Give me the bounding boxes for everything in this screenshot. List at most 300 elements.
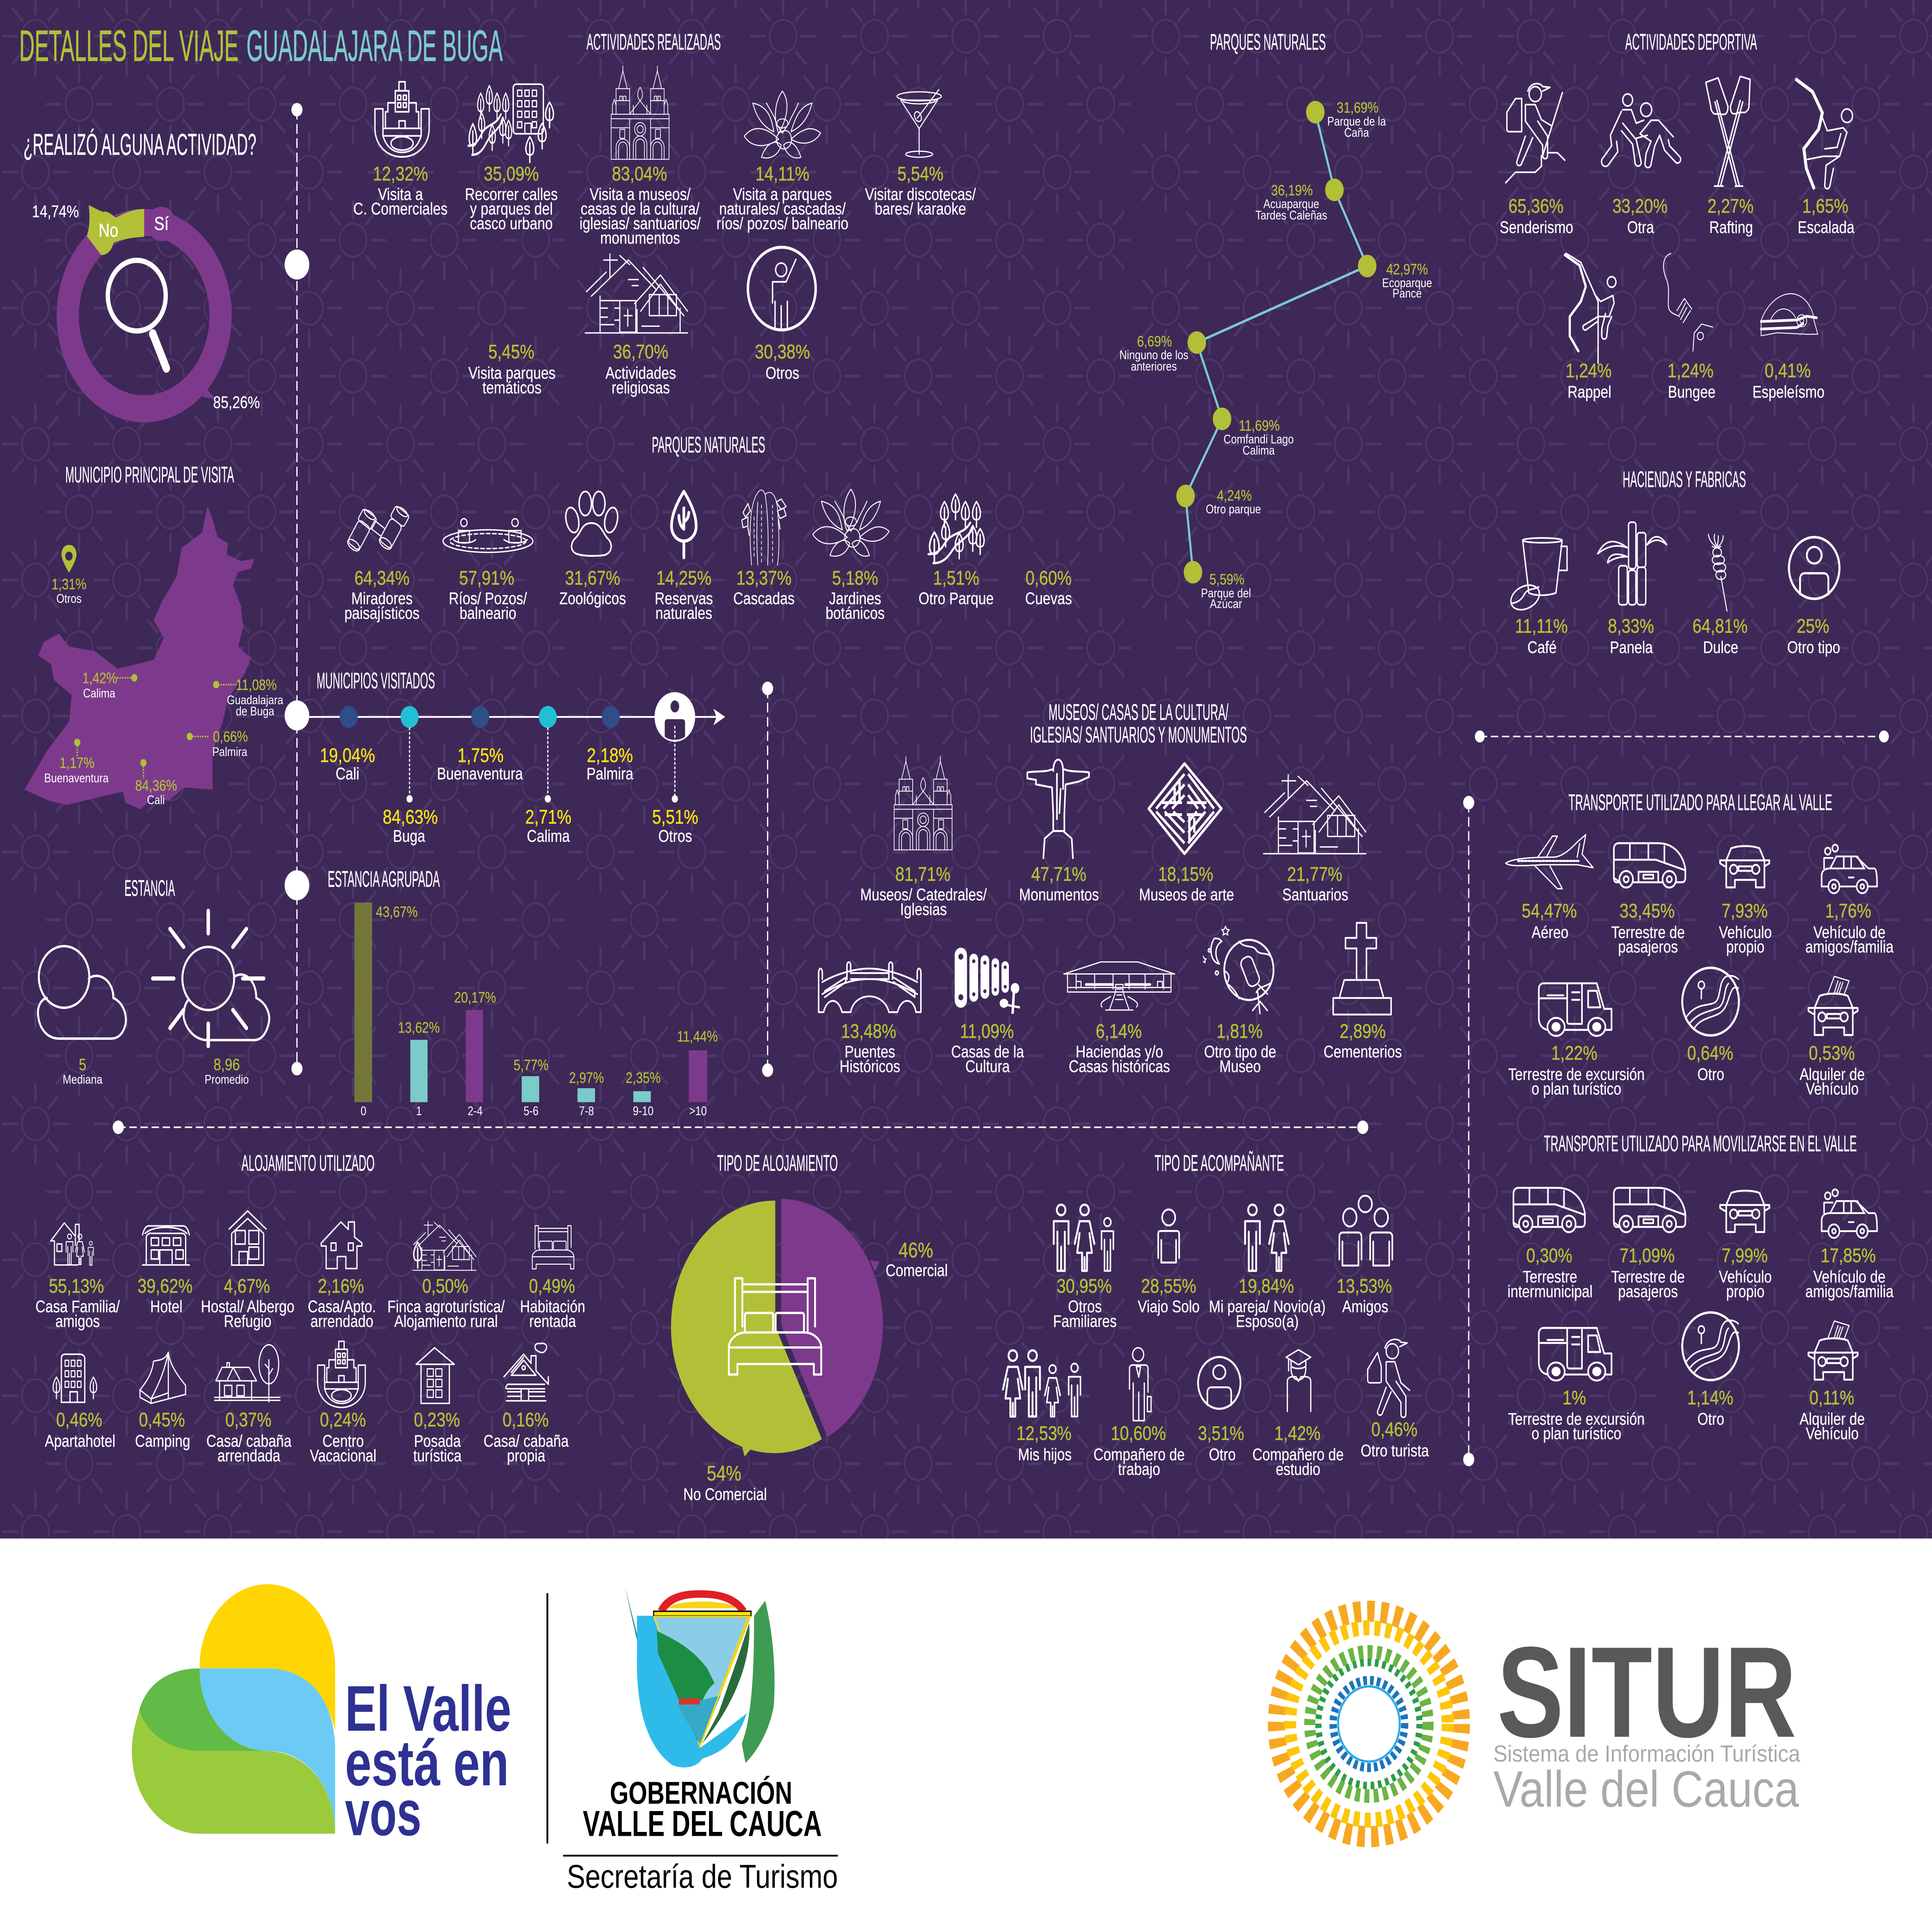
label: Calima (527, 827, 570, 845)
text: secretaría de turismo: Secretaría de Turismo (567, 1858, 838, 1895)
label: Santuarios (1282, 886, 1348, 904)
value: 2,27% (1708, 195, 1753, 217)
icon: plane (1506, 835, 1593, 889)
panel: parques naturales route (1119, 30, 1432, 611)
label: Mis hijos (1018, 1446, 1072, 1464)
icon: xylophone (955, 948, 1020, 1014)
value: 0,46% (1371, 1418, 1417, 1440)
value: 0,60% (1026, 567, 1071, 589)
value: 21,77% (1287, 863, 1342, 885)
value: 30,95% (1057, 1275, 1112, 1297)
value: Otros: 5,51% (652, 806, 698, 828)
icon: iglesia (894, 757, 952, 850)
icon: calles y parques (468, 84, 553, 162)
panel: transporte para llegar al valle (1506, 790, 1894, 1098)
icon: rental car (1808, 976, 1858, 1035)
label: pasajeros (1618, 1282, 1678, 1301)
bar chart: >10 (689, 1104, 707, 1118)
value: 7,99% (1722, 1245, 1768, 1267)
value: 13,48% (841, 1020, 896, 1042)
label: turística (413, 1447, 462, 1465)
value: 0,30% (1526, 1245, 1572, 1267)
label: Hostal/ Albergo (201, 1298, 294, 1316)
text: gobernación: VALLE DEL CAUCA (583, 1804, 822, 1844)
value: 1,81% (1216, 1020, 1263, 1042)
label: Actividades (605, 364, 676, 383)
icon: hacienda (1064, 962, 1175, 1010)
label: Otro Parque (918, 589, 994, 608)
timeline with nodes (297, 692, 725, 803)
panel: tipo de acompañante (1003, 1151, 1429, 1479)
icon: tent (140, 1352, 185, 1403)
route labels: Pance (1393, 287, 1422, 301)
icon: car with friends (1821, 1189, 1877, 1238)
value: comercial: 46% (899, 1238, 933, 1262)
icon: person (1198, 1357, 1240, 1409)
timeline connector lines (113, 103, 1889, 1466)
icon: hostal (229, 1211, 266, 1265)
value: 0,23% (414, 1409, 460, 1430)
label: Alojamiento rural (394, 1312, 498, 1331)
logo: El Valle está en vos: está en (345, 1728, 509, 1799)
label: estudio (1276, 1460, 1320, 1479)
label: y parques del (470, 200, 553, 218)
donut labels: Sí (154, 213, 169, 234)
value: 13,37% (736, 567, 791, 589)
value: 47,71% (1031, 863, 1086, 885)
label: Escalada (1798, 218, 1855, 237)
label: propio (1726, 1282, 1765, 1301)
value: 11,09% (960, 1020, 1014, 1042)
text: gobernación: GOBERNACIÓN (610, 1775, 792, 1810)
label: Otro (1697, 1410, 1724, 1429)
label: Casas históricas (1069, 1057, 1170, 1076)
label: Comercial (886, 1261, 948, 1280)
map labels: 11,08% (236, 676, 277, 693)
icon: kids (1003, 1350, 1080, 1417)
label: Refugio (224, 1312, 271, 1331)
label: propio (1726, 938, 1765, 956)
label: Jardines (829, 589, 881, 608)
label: monumentos (600, 229, 680, 247)
value: 7,93% (1722, 900, 1768, 922)
label: Dulce (1703, 638, 1738, 657)
value: 1,51% (933, 567, 979, 589)
value: 0,49% (529, 1275, 575, 1297)
map of Valle del Cauca (25, 506, 255, 810)
value: 1,65% (1802, 195, 1849, 217)
icon: bus (1514, 1188, 1585, 1232)
icon: map pin (61, 545, 77, 573)
value: 1,76% (1825, 900, 1871, 922)
panel: museos casas de la cultura (819, 700, 1402, 1076)
value: 19,84% (1239, 1275, 1294, 1297)
route labels: Ninguno de los (1119, 348, 1189, 362)
icon: centro comercial (375, 82, 429, 157)
icon: bed (532, 1226, 574, 1269)
label: Finca agroturística/ (388, 1298, 505, 1316)
label: Esposo(a) (1236, 1312, 1299, 1331)
route labels: 36,19% (1271, 182, 1313, 199)
heading: ACTIVIDADES DEPORTIVA (1625, 30, 1757, 54)
donut labels: No (99, 220, 118, 241)
label: Haciendas y/o (1076, 1043, 1163, 1061)
bar chart: 9-10 (633, 1104, 653, 1118)
value: 17,85% (1821, 1245, 1876, 1267)
label: Posada (414, 1432, 461, 1451)
stats (63, 1056, 249, 1087)
label: Zoológicos (559, 589, 626, 608)
icon: leaf (672, 492, 696, 558)
bar chart: 0 (361, 1104, 366, 1118)
label: Iglesias (900, 900, 947, 919)
logo: El Valle está en vos (132, 1584, 511, 1849)
value: 10,60% (1111, 1422, 1166, 1444)
bar chart: 43,67% (376, 903, 418, 920)
panel: parques naturales visitados (344, 432, 1072, 622)
bar chart: 20,17% (454, 989, 496, 1006)
icon: posada (416, 1348, 454, 1403)
value: 4,67% (224, 1275, 270, 1297)
heading: IGLESIAS/ SANTUARIOS Y MONUMENTOS (1030, 723, 1247, 748)
value: 36,70% (613, 341, 668, 363)
label: Apartahotel (45, 1432, 116, 1451)
label: Vehículo (1806, 1424, 1859, 1443)
label: arrendado (310, 1312, 373, 1331)
icon: climber (1796, 80, 1852, 189)
value: 0,16% (503, 1409, 549, 1430)
label: Visita a parques (733, 185, 832, 204)
route labels: anteriores (1131, 359, 1177, 374)
label: rentada (529, 1312, 576, 1331)
label: o plan turístico (1532, 1080, 1621, 1098)
label: Terrestre de (1611, 1268, 1685, 1286)
value: 0,11% (1810, 1386, 1854, 1408)
value: 55,13% (49, 1275, 104, 1297)
icon: family (1054, 1205, 1113, 1271)
value: 11,11% (1515, 615, 1568, 637)
label: Vehículo (1719, 1268, 1772, 1286)
label: Rafting (1709, 218, 1753, 237)
value: 54,47% (1522, 900, 1577, 922)
icon: van (1539, 983, 1612, 1036)
value: 0,24% (320, 1409, 366, 1430)
label: Senderismo (1500, 218, 1573, 237)
label: paisajísticos (344, 604, 420, 622)
map labels: Buenaventura (44, 771, 109, 785)
icon: bus (1614, 1188, 1685, 1232)
icon: student (1286, 1350, 1311, 1412)
map labels: 0,66% (213, 728, 248, 745)
route labels (1119, 99, 1432, 611)
label: Vacacional (310, 1447, 376, 1465)
value: 1,14% (1687, 1386, 1733, 1408)
panel: actividades deportiva (1500, 30, 1855, 401)
panel: municipios visitados (297, 668, 725, 845)
logo: SITUR wordmark: Valle del Cauca (1493, 1760, 1799, 1818)
label: Casa/ cabaña (206, 1432, 291, 1451)
label: Ríos/ Pozos/ (449, 589, 527, 608)
bar chart (354, 903, 718, 1118)
label: Casa/Apto. (308, 1298, 376, 1316)
value: 0,50% (422, 1275, 468, 1297)
route labels: Otro parque (1206, 502, 1261, 516)
label: balneario (459, 604, 516, 622)
label: propia (507, 1447, 546, 1465)
label: Casas de la (951, 1043, 1024, 1061)
map labels: 1,31% (51, 576, 87, 593)
icon: bridge (819, 962, 921, 1012)
donut labels: 14,74% (32, 202, 79, 221)
label: Otro (1697, 1065, 1724, 1084)
label: Visita a museos/ (590, 185, 690, 204)
label: Cementerios (1324, 1043, 1402, 1061)
bar chart: 11,44% (677, 1028, 718, 1045)
route labels: Comfandi Lago (1224, 432, 1294, 446)
label: Amigos (1342, 1298, 1388, 1316)
map labels: 84,36% (135, 777, 177, 794)
value: 3,51% (1198, 1422, 1244, 1444)
label: Vehículo de (1813, 1268, 1886, 1286)
icon: person raising hand (748, 247, 816, 330)
icon: waterfall (742, 490, 786, 565)
icon: worker (1129, 1348, 1151, 1421)
bar chart: 5-6 (524, 1104, 539, 1118)
heading: TIPO DE ACOMPAÑANTE (1155, 1151, 1284, 1176)
route labels: Tardes Caleñas (1255, 208, 1327, 223)
route labels: 5,59% (1209, 571, 1244, 588)
label: Centro (322, 1432, 364, 1451)
label: Vehículo (1719, 923, 1772, 942)
label: Camping (135, 1432, 190, 1451)
value: 30,38% (755, 341, 810, 363)
label: Compañero de (1094, 1446, 1185, 1464)
label: Buenaventura (437, 765, 523, 783)
icon: sun with cloud (153, 911, 269, 1046)
icon: candy (1709, 534, 1727, 611)
panel: municipio principal de visita (25, 463, 283, 810)
label: Recorrer calles (465, 185, 558, 204)
label: arrendada (218, 1447, 281, 1465)
heading: ACTIVIDADES REALIZADAS (587, 30, 721, 54)
label: Históricos (840, 1057, 900, 1076)
logo: SITUR wordmark (1493, 1620, 1800, 1818)
label: Vehículo de (1813, 923, 1886, 942)
value: 64,34% (354, 567, 410, 589)
value: 1,24% (1566, 359, 1612, 381)
icon: coffee (1508, 538, 1567, 614)
route line with nodes (1176, 101, 1376, 583)
label: Visita parques (468, 364, 556, 383)
panel: estancia (38, 876, 269, 1087)
value: 0,46% (56, 1409, 102, 1430)
logo divider (546, 1593, 548, 1844)
value: 1,24% (1667, 359, 1714, 381)
value: Calima: 2,71% (525, 806, 571, 828)
heading: TIPO DE ALOJAMIENTO (717, 1151, 838, 1176)
label: Otros (765, 364, 799, 383)
bar chart: 5,77% (514, 1057, 549, 1073)
label: Vehículo (1806, 1080, 1859, 1098)
icon: wrestlers (1602, 94, 1680, 168)
panel: tipo de alojamiento (671, 1151, 948, 1504)
value: 1,42% (1274, 1422, 1320, 1444)
panel: realizo alguna actividad (24, 128, 260, 412)
icon: bed (729, 1278, 821, 1374)
value: 57,91% (459, 567, 514, 589)
label: trabajo (1118, 1460, 1160, 1479)
value: 65,36% (1509, 195, 1563, 217)
icon: person (1789, 537, 1840, 599)
icon: globe with telescope (1203, 926, 1274, 1014)
icon: car (1720, 1191, 1769, 1232)
value: 81,71% (895, 863, 951, 885)
value: 2,16% (318, 1275, 364, 1297)
value: 71,09% (1619, 1245, 1675, 1267)
value: 0,41% (1765, 359, 1811, 381)
map labels: Guadalajara (227, 693, 283, 707)
donut chart (68, 205, 221, 409)
bar chart: 1 (416, 1104, 422, 1118)
label: ríos/ pozos/ balneario (716, 214, 849, 233)
route labels: Acuaparque (1264, 197, 1319, 211)
route labels: 42,97% (1386, 261, 1428, 278)
icon: helmet (1761, 294, 1818, 336)
route labels: Parque del (1201, 587, 1251, 600)
heading: PARQUES NATURALES (652, 432, 765, 457)
bar chart: 2-4 (468, 1104, 483, 1118)
route labels: 4,24% (1217, 487, 1252, 504)
label: naturales (655, 604, 712, 622)
heading: MUNICIPIO PRINCIPAL DE VISITA (65, 463, 234, 488)
label: Terrestre (1523, 1268, 1577, 1286)
value: 5,45% (488, 341, 534, 363)
value: 0,53% (1809, 1042, 1855, 1064)
value: 6,14% (1096, 1020, 1142, 1042)
value: Palmira: 2,18% (587, 744, 633, 766)
label: Otros (1068, 1298, 1102, 1316)
value: 25% (1797, 615, 1829, 637)
value: 0,37% (225, 1409, 272, 1430)
value: 0,45% (139, 1409, 185, 1430)
label: Habitación (520, 1298, 585, 1316)
label: Otro turista (1361, 1442, 1429, 1460)
icon: bungee (1663, 253, 1713, 351)
value: 64,81% (1692, 615, 1748, 637)
label: Familiares (1053, 1312, 1117, 1331)
label: No Comercial (683, 1485, 767, 1504)
label: temáticos (483, 379, 541, 397)
label: Visitar discotecas/ (865, 185, 976, 204)
label: iglesias/ santuarios/ (580, 214, 701, 233)
label: amigos (55, 1312, 100, 1331)
value: 14,25% (656, 567, 711, 589)
stats: Promedio (204, 1073, 249, 1087)
label: Alquiler de (1799, 1410, 1865, 1429)
label: bares/ karaoke (875, 200, 966, 218)
label: Cali (335, 765, 359, 783)
label: Bungee (1668, 383, 1716, 401)
logo: escudo Valle del Cauca (625, 1586, 775, 1767)
label: Casa/ cabaña (483, 1432, 569, 1451)
label: intermunicipal (1507, 1282, 1593, 1301)
map labels: Calima (83, 686, 116, 701)
heading (1030, 700, 1247, 748)
bar chart: 2,35% (626, 1070, 661, 1086)
label: Cultura (965, 1057, 1010, 1076)
label: Viajo Solo (1138, 1298, 1200, 1316)
logo: SITUR wordmark: SITUR (1497, 1620, 1796, 1764)
label: botánicos (826, 604, 884, 622)
value: 5,54% (897, 163, 944, 185)
value: 1,22% (1551, 1042, 1597, 1064)
label: Terrestre de (1611, 923, 1685, 942)
icon: road (1682, 968, 1739, 1036)
icon: hiker (1506, 83, 1565, 183)
icon: van (1539, 1328, 1612, 1381)
label: Otro tipo de (1204, 1043, 1276, 1061)
value: 13,53% (1337, 1275, 1392, 1297)
stats: Mediana (63, 1073, 102, 1087)
value: 18,15% (1158, 863, 1213, 885)
panel: alojamiento utilizado (36, 1151, 585, 1465)
panel: estancia agrupada (328, 867, 718, 1118)
logo rule (563, 1855, 838, 1857)
panel: footer logos (132, 1584, 1800, 1895)
icon: cabaña (504, 1344, 548, 1401)
map labels: Otros (56, 592, 82, 605)
item: centros comerciales: 12,32% (373, 163, 428, 185)
icon: lotus (813, 489, 889, 556)
icon: road (1682, 1313, 1739, 1380)
panel: haciendas y fabricas (1508, 467, 1840, 657)
icon: santuario (1264, 775, 1366, 854)
icon: binoculars (345, 487, 410, 571)
icon: bus (1614, 843, 1685, 888)
value: 33,45% (1619, 900, 1675, 922)
icon: martini (897, 90, 941, 157)
icon: centro vacacional (318, 1341, 365, 1407)
label: casco urbano (470, 214, 553, 233)
icon: tombstone (1333, 923, 1391, 1015)
label: Mi pareja/ Novio(a) (1209, 1298, 1325, 1316)
label: Terrestre de excursión (1508, 1065, 1645, 1084)
text: gobernación (583, 1775, 822, 1844)
map labels: 1,17% (60, 755, 94, 771)
icon: lotus (744, 91, 821, 158)
icon: walker (1368, 1339, 1410, 1417)
label: Reservas (655, 589, 713, 608)
map labels: de Buga (236, 704, 274, 718)
icon: friends (1339, 1196, 1392, 1265)
heading: PARQUES NATURALES (1210, 30, 1326, 54)
label: naturales/ cascadas/ (719, 200, 846, 218)
bar chart: 2,97% (569, 1070, 604, 1086)
label: amigos/familia (1805, 1282, 1894, 1301)
heading: MUNICIPIOS VISITADOS (317, 668, 435, 694)
value: 33,20% (1612, 195, 1668, 217)
title: GUADALAJARA DE BUGA (247, 22, 503, 70)
panel: transporte para movilizarse (1507, 1131, 1894, 1443)
value: 8,33% (1608, 615, 1654, 637)
icon: solo (1158, 1209, 1179, 1262)
value: no comercial: 54% (707, 1461, 741, 1485)
label: Terrestre de excursión (1508, 1410, 1645, 1429)
label: Panela (1610, 638, 1653, 657)
route labels: Caña (1344, 126, 1369, 140)
icon: finca (413, 1221, 476, 1270)
donut labels (32, 202, 260, 412)
